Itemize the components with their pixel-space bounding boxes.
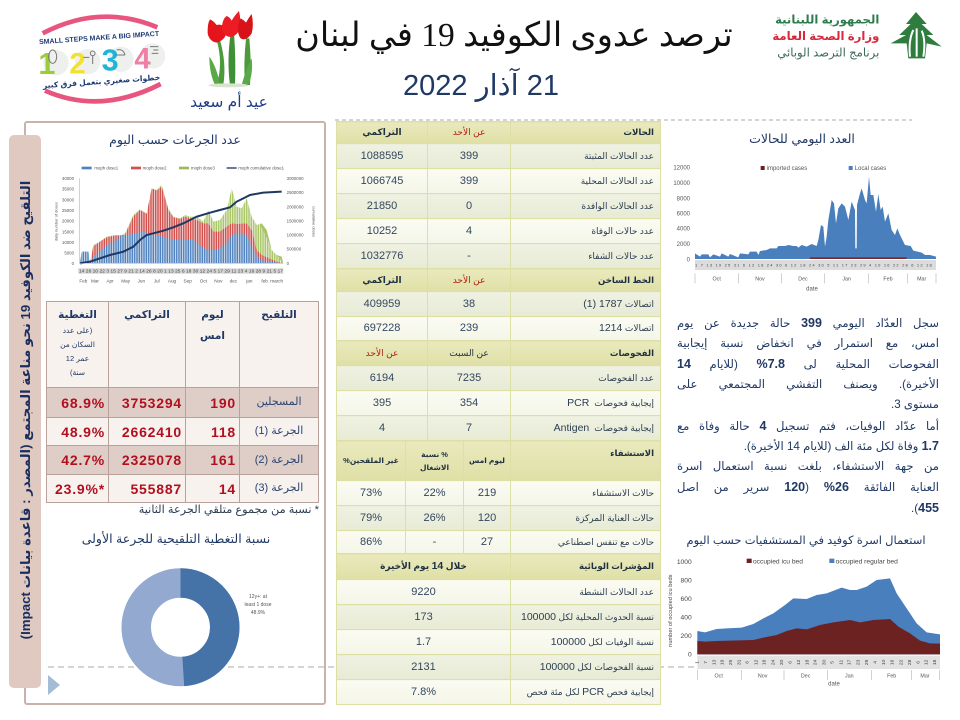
donut label: 48.9%	[251, 610, 266, 616]
text: daily summary: سجل العدّاد اليومي 399 حالة جديدة عن يوم	[677, 316, 939, 330]
header row: سنة)	[70, 368, 85, 376]
hotline header: الخط الساخن	[598, 275, 654, 285]
calls 1214: اتصالات 1214	[599, 322, 654, 334]
month labels: date	[806, 286, 818, 292]
antigen: 4	[379, 422, 385, 434]
hospital cases: 73%	[360, 486, 382, 498]
cases header: التراكمي	[362, 127, 402, 137]
header row: عمر 12	[66, 354, 89, 362]
date ticks: 6	[787, 661, 793, 664]
heading: doses per day: عدد الجرعات حسب اليوم	[109, 133, 241, 148]
icon: cedar	[891, 12, 942, 58]
left axis: 30000	[62, 197, 75, 202]
month labels: dec	[230, 279, 238, 284]
legend: moph dose1	[94, 165, 119, 170]
date ticks: 6	[915, 661, 921, 664]
date ticks: 17	[847, 659, 853, 665]
logo: small steps make a big impact: 4	[134, 42, 151, 75]
text: daily summary	[677, 316, 939, 514]
incidence	[337, 605, 660, 629]
date ticks: 4	[872, 661, 878, 664]
date ticks: 12	[796, 659, 802, 665]
left axis: 25000	[62, 208, 75, 213]
sidebar: vaccination heading	[9, 135, 41, 688]
axis titles: daily number of doses	[53, 202, 58, 241]
header row: امس	[200, 330, 225, 342]
date ticks: 18	[804, 659, 810, 665]
ventilated: 86%	[360, 536, 382, 548]
month labels: Oct	[200, 279, 208, 284]
row: dose 2: 42.7%	[61, 452, 105, 468]
date ticks: 24	[813, 659, 819, 665]
ICU: 79%	[360, 512, 382, 524]
hospital header: الاشغال	[420, 462, 449, 472]
antigen: 7	[466, 422, 472, 434]
y axis: 2000	[677, 242, 691, 248]
y axis	[677, 559, 692, 659]
antigen: إيجابية فحوصات Antigen	[554, 422, 654, 434]
test rate	[337, 655, 660, 679]
PCR: 354	[460, 396, 478, 408]
cases header: عن الأحد	[453, 127, 485, 137]
text: daily summary: 1.7 وفاة لكل مئة الف (للايام 14 الأخيرة).	[744, 439, 939, 453]
date ticks: 1 7 13 19 25 31 6 12 18 24 30 6 12 18 24 30 5 11 17 23 29 4 10 16 22 28 6 12 18	[695, 263, 932, 268]
legend: Local cases	[855, 166, 886, 172]
hospital header: الاستشفاء	[610, 448, 654, 458]
right axis: 1500000	[287, 218, 304, 223]
month labels: Dec	[801, 673, 811, 679]
month labels: Oct	[715, 673, 723, 679]
month labels: Mar	[920, 673, 930, 679]
date ticks: 25	[728, 659, 734, 665]
header row: التلقيح	[261, 309, 297, 321]
row: dose 2: الجرعة (2)	[255, 454, 303, 466]
imported	[337, 194, 660, 218]
date ticks: 28	[907, 659, 913, 665]
sidebar: vaccination heading: التلقيح ضد الكوفيد 19 نحو مناعة المجتمع (المصدر : قاعدة بيانات Impact)	[18, 181, 33, 639]
legend: moph cumulative dose1	[238, 165, 285, 170]
header row: التراكمي	[124, 309, 170, 321]
ICU: 26%	[423, 512, 446, 524]
row: registered: المسجلين	[256, 396, 302, 408]
deaths: 10252	[367, 224, 397, 236]
x axis	[697, 670, 939, 680]
axis titles	[53, 202, 317, 241]
chart: daily cases	[673, 166, 936, 292]
right axis: 2000000	[287, 204, 304, 209]
date ticks: 12	[753, 659, 759, 665]
cases header	[337, 122, 660, 704]
y axis: 0	[688, 652, 692, 659]
date ticks: 23	[855, 659, 861, 665]
test rate: 2131	[411, 660, 436, 672]
y axis: 0	[687, 257, 691, 263]
date ticks: 30	[779, 659, 785, 665]
ventilated: حالات مع تنفس اصطناعي	[558, 536, 654, 546]
left axis: 0	[72, 261, 75, 266]
row: dose 3: 23.9%*	[55, 480, 105, 496]
month labels: march	[270, 279, 284, 284]
confirmed: 1088595	[361, 150, 403, 162]
logo: small steps make a big impact: 2	[69, 47, 86, 80]
row: dose 2: 161	[210, 452, 236, 468]
PCR positivity: إيجابية فحص PCR لكل مئة فحص	[527, 686, 654, 698]
text: daily summary: أما عدّاد الوفيات، فتم تسجيل 4 حالة وفاة مع	[677, 418, 939, 432]
y axis: 8000	[677, 196, 691, 202]
date ticks: 7	[703, 661, 709, 664]
tests: عدد الفحوصات	[598, 372, 654, 382]
axis titles: cumulative doses	[312, 206, 317, 237]
date ticks: 22	[898, 659, 904, 665]
ventilated	[337, 531, 660, 553]
heading: donut: نسبة التغطية التلقيحية للجرعة الأولى	[82, 531, 270, 547]
title: ترصد عدوى الكوفيد 19 في لبنان	[295, 17, 733, 54]
month labels	[79, 279, 284, 284]
hotline header: التراكمي	[362, 274, 402, 284]
imported: 0	[466, 200, 472, 212]
PCR positivity	[337, 680, 660, 704]
legend: imported cases	[767, 166, 807, 172]
confirmed	[337, 144, 660, 168]
table: vaccination counts	[46, 301, 319, 503]
row: dose 3: الجرعة (3)	[255, 482, 303, 494]
local	[337, 169, 660, 193]
icon: red tulips	[208, 11, 253, 87]
month labels: Nov	[758, 673, 768, 679]
active cases: 9220	[411, 586, 436, 598]
indicators header: خلال 14 يوم الأخيرة	[380, 560, 467, 572]
PCR: إيجابية فحوصات PCR	[567, 397, 654, 409]
row: registered: 190	[210, 394, 236, 410]
logo: small steps make a big impact: 1	[38, 47, 55, 81]
hospital cases: 219	[478, 486, 496, 498]
ICU: حالات العناية المركزة	[575, 512, 654, 522]
incidence: 173	[414, 610, 433, 622]
date ticks: 29	[864, 659, 870, 665]
logo: small steps make a big impact: خطوات صغيري بتعمل فرق كبير	[42, 73, 161, 90]
date ticks: 16	[890, 659, 896, 665]
row: registered: 3753294	[122, 394, 182, 410]
month labels: Apr	[106, 279, 114, 284]
donut label: 12y+: at	[249, 594, 268, 600]
month labels: Jul	[154, 279, 160, 284]
confirmed: عدد الحالات المثبتة	[584, 150, 654, 160]
text: daily summary: الأخيرة). ويصنف التفشي المجتمعي على	[677, 378, 939, 390]
text: daily summary: امس، مع استمرار في انخفاض نسبة إيجابية	[677, 336, 939, 350]
left axis: 5000	[64, 251, 75, 256]
hotline header	[337, 269, 660, 291]
local: عدد الحالات المحلية	[581, 176, 654, 186]
legend: moph dose3	[191, 165, 215, 170]
recovered: -	[467, 250, 471, 262]
tests header: عن السبت	[449, 348, 489, 358]
left axis: 35000	[62, 187, 75, 192]
hospital cases: حالات الاستشفاء	[592, 488, 654, 498]
date ticks: 19	[720, 659, 726, 665]
month labels: May	[121, 279, 131, 284]
antigen	[337, 416, 660, 440]
y axis: 12000	[673, 166, 691, 172]
tests	[337, 366, 660, 390]
table: cases, hotline, tests, hospital, indicators	[336, 121, 661, 705]
date ticks	[695, 659, 938, 665]
month labels: Oct	[713, 277, 721, 283]
calls 1214: 697228	[364, 322, 400, 334]
donut label	[245, 594, 272, 616]
right axis: 3000000	[287, 176, 304, 181]
row: dose 3: 555887	[130, 480, 182, 496]
left axis: 10000	[62, 240, 75, 245]
row: registered	[47, 388, 318, 417]
month labels: Jun	[138, 279, 145, 284]
recovered: عدد حالات الشفاء	[588, 250, 654, 260]
hospital header: ليوم امس	[469, 456, 505, 465]
legend	[747, 558, 898, 565]
dashed rule inside panel	[48, 666, 326, 668]
text: mothers day greeting: عيد أم سعيد	[190, 91, 268, 111]
month labels	[715, 673, 930, 688]
recovered	[337, 244, 660, 268]
left axis	[62, 176, 75, 266]
row: dose 1: 2662410	[122, 424, 182, 440]
header row: ليوم	[201, 309, 224, 321]
row: dose 1	[47, 418, 318, 445]
y axis: 600	[681, 596, 692, 603]
death rate: 1.7	[416, 636, 431, 648]
header row	[47, 302, 318, 502]
month labels: date	[828, 682, 840, 688]
y axis: 800	[681, 577, 692, 584]
tests header	[337, 341, 660, 365]
row: dose 1: 118	[211, 424, 236, 440]
month labels: Dec	[798, 277, 808, 283]
date ticks: 18	[932, 659, 938, 665]
tests header: عن الأحد	[366, 348, 398, 358]
calls 1214: 239	[460, 322, 478, 334]
month labels	[713, 277, 926, 292]
ventilated: -	[433, 536, 436, 548]
y axis title: number of occupied icu beds	[668, 574, 674, 647]
row: dose 3	[47, 475, 318, 502]
left axis: 20000	[62, 219, 75, 224]
header row: التغطية	[58, 309, 97, 321]
row: dose 3: 14	[219, 480, 236, 496]
row: dose 1: 48.9%	[61, 424, 105, 440]
date ticks: 30	[821, 659, 827, 665]
month labels: Feb	[887, 673, 896, 679]
panel: vaccination	[25, 122, 325, 704]
date: 21 آذار 2022	[403, 67, 559, 102]
text: ministry: وزارة الصحة العامة	[772, 30, 879, 44]
hospital header: % نسبة	[421, 450, 448, 458]
local: 1066745	[361, 174, 403, 186]
heading: daily cases: العدد اليومي للحالات	[749, 132, 855, 147]
text: republic: الجمهورية اللبنانية	[775, 13, 879, 27]
header row: (على عدد	[63, 326, 92, 334]
left axis: 15000	[62, 229, 75, 234]
tests header: الفحوصات	[610, 348, 654, 358]
row: dose 2	[47, 446, 318, 474]
month labels: Feb	[883, 277, 893, 283]
local: 399	[460, 174, 478, 186]
chart: hospital beds	[668, 558, 940, 688]
imported: 21850	[367, 200, 397, 212]
logo: small steps make a big impact: SMALL STEPS MAKE A BIG IMPACT	[39, 31, 160, 46]
month labels: Mar	[917, 277, 926, 283]
month labels: Nov	[214, 279, 223, 284]
right axis: 2500000	[287, 190, 304, 195]
y axis: 6000	[677, 211, 691, 217]
y axis: 10000	[673, 181, 691, 187]
date ticks: 12	[924, 659, 930, 665]
indicators header	[337, 554, 660, 579]
text: daily summary: من جهة الاستشفاء، بلغت نسبة استعمال اسرة	[677, 460, 939, 472]
PCR: 395	[373, 396, 391, 408]
calls 1787: اتصالات 1787 (1)	[583, 298, 654, 310]
chart: daily doses	[53, 165, 317, 284]
month labels: feb	[261, 279, 268, 284]
y axis: 1000	[677, 559, 692, 566]
heading: hospital beds: استعمال اسرة كوفيد في المستشفيات حسب اليوم	[686, 535, 926, 548]
left axis: 40000	[62, 176, 75, 181]
hospital header	[337, 441, 660, 480]
deaths: عدد حالات الوفاة	[591, 226, 654, 236]
donut label: least 1 dose	[245, 602, 272, 608]
hospital header: %غير الملقحين	[343, 456, 399, 465]
test rate: نسبة الفحوصات لكل 100000	[540, 661, 654, 673]
date ticks: 18	[762, 659, 768, 665]
deaths	[337, 219, 660, 243]
date ticks: 10	[881, 659, 887, 665]
icon: triangle marker	[48, 675, 60, 695]
y axis: 400	[681, 615, 692, 622]
date ticks: 24	[770, 659, 776, 665]
date ticks: 13	[711, 659, 717, 665]
legend	[82, 165, 285, 170]
row: dose 1: الجرعة (1)	[255, 425, 303, 437]
hospital cases: 22%	[423, 486, 446, 498]
date ticks: 31	[736, 659, 742, 665]
chart: first dose coverage donut	[136, 583, 272, 672]
date ticks: 6	[745, 661, 751, 664]
month labels: Feb	[79, 279, 88, 284]
right axis: 1000000	[287, 233, 304, 238]
ICU	[337, 506, 660, 530]
y axis: 4000	[677, 227, 691, 233]
y axis: 200	[681, 633, 692, 640]
text: daily summary: 455).	[911, 500, 939, 514]
month labels: Nov	[755, 277, 765, 283]
date ticks: 5	[830, 661, 836, 664]
hotline header: عن الأحد	[453, 274, 485, 284]
PCR positivity: 7.8%	[411, 686, 436, 698]
text: daily summary: العناية الفائقة 26% (120 سرير من اصل	[677, 480, 939, 494]
text: daily summary: الفحوصات المحلية لى 7.8% (للايام 14	[677, 357, 939, 371]
legend	[761, 166, 886, 172]
logo: ministry of public health	[772, 12, 942, 61]
hospital cases	[337, 481, 660, 505]
recovered: 1032776	[361, 250, 403, 262]
right axis: 500000	[287, 247, 302, 252]
month labels: Aug	[168, 279, 177, 284]
PCR	[337, 391, 660, 415]
indicators header: المؤشرات الوبائية	[579, 561, 654, 571]
active cases	[337, 580, 660, 604]
deaths: 4	[466, 224, 472, 236]
x axis	[695, 273, 936, 283]
header row: السكان من	[60, 340, 95, 348]
month labels: Jan	[845, 673, 854, 679]
incidence: نسبة الحدوث المحلية لكل 100000	[521, 611, 654, 623]
cases header: الحالات	[623, 127, 654, 137]
right axis	[287, 176, 304, 266]
month labels: jan	[245, 279, 253, 284]
text: programme: برنامج الترصد الوبائي	[777, 47, 879, 61]
calls 1214	[337, 317, 660, 340]
date ticks: 1	[695, 661, 701, 664]
row: dose 2: 2325078	[122, 452, 182, 468]
tests: 6194	[370, 372, 394, 384]
ventilated: 27	[481, 536, 493, 548]
date ticks: 11	[838, 660, 844, 665]
text: daily summary: مستوى 3.	[891, 398, 939, 411]
month labels: Sep	[184, 279, 192, 284]
x axis labels: 14 26 10 22 3 15 27 9 21 2 14 26 8 20 1 13 25 6 18 30 12 24 5 17 29 11 23 4 16 28 9 21 5 17	[79, 268, 283, 273]
tests: 7235	[457, 372, 481, 384]
month labels: Jan	[842, 277, 851, 283]
active cases: عدد الحالات النشطة	[579, 586, 654, 596]
legend: moph dose2	[143, 165, 167, 170]
logo: small steps make a big impact	[37, 15, 165, 105]
row: registered: 68.9%	[61, 394, 105, 410]
imported: عدد الحالات الوافدة	[581, 200, 654, 210]
calls 1787: 409959	[364, 298, 400, 310]
ICU: 120	[478, 512, 496, 524]
logo: small steps make a big impact: 3	[102, 44, 119, 78]
dashed rule: bottom	[48, 666, 702, 668]
right axis: 0	[287, 261, 290, 266]
y axis	[673, 166, 691, 263]
legend: occupied icu bed	[753, 558, 803, 565]
death rate: نسبة الوفيات لكل 100000	[551, 636, 654, 648]
footnote: * نسبة من مجموع متلقي الجرعة الثانية	[139, 504, 319, 516]
death rate	[337, 630, 660, 654]
month labels: Mar	[91, 279, 99, 284]
dashed rule: top	[335, 119, 912, 121]
calls 1787: 38	[463, 298, 475, 310]
confirmed: 399	[460, 150, 478, 162]
calls 1787	[337, 292, 660, 316]
legend: occupied regular bed	[836, 558, 898, 565]
